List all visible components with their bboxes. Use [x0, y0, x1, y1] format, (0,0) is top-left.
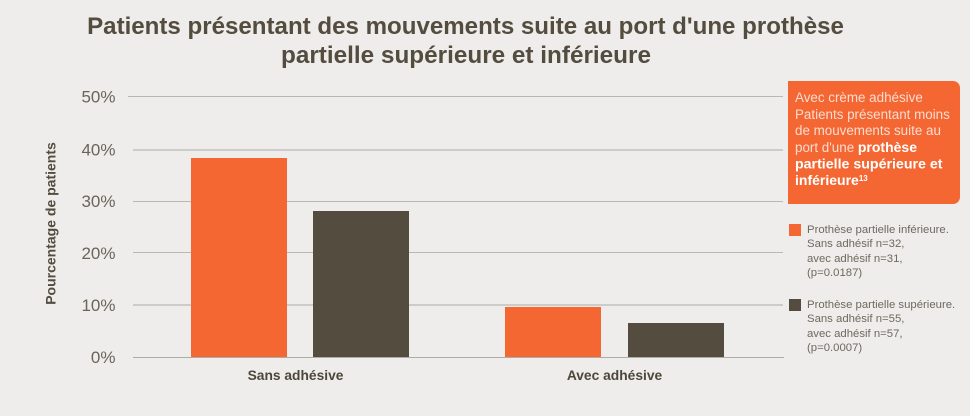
title [87, 13, 844, 69]
legend: prothèse partielle inférieure: (p=0.0187) [807, 267, 862, 279]
y axis labels: 10% [81, 296, 116, 315]
y axis labels: 40% [81, 140, 116, 160]
callout: partielle supérieure et [795, 156, 943, 172]
y axis labels: 50% [81, 88, 116, 106]
x axis labels: Avec adhésive [567, 368, 663, 383]
callout: Patients présentant moins [795, 107, 950, 122]
callout: Avec crème adhésive [795, 90, 923, 105]
callout [788, 81, 960, 204]
y axis labels [81, 88, 116, 367]
legend: prothèse partielle inférieure [789, 224, 949, 279]
legend: prothèse partielle inférieure: avec adhésif n=31, [807, 253, 903, 265]
y axis labels: 0% [91, 348, 116, 367]
legend: prothèse partielle supérieure: avec adhésif n=57, [807, 328, 903, 340]
y axis labels: 30% [81, 192, 116, 211]
bars: sans adhésive [191, 158, 409, 357]
legend: prothèse partielle supérieure [789, 299, 955, 354]
legend: prothèse partielle supérieure: (p=0.0007) [807, 342, 862, 354]
x axis labels [248, 368, 663, 383]
callout: de mouvements suite au [795, 123, 941, 138]
bar chart [81, 88, 784, 383]
y axis title: Pourcentage de patients [42, 142, 58, 305]
x axis labels: Sans adhésive [248, 368, 344, 383]
legend: prothèse partielle supérieure: Prothèse partielle supérieure. [807, 299, 955, 311]
y axis labels: 20% [81, 244, 116, 263]
bars: avec adhésive [505, 307, 724, 357]
legend: prothèse partielle inférieure: Prothèse partielle inférieure. [807, 224, 949, 236]
legend: prothèse partielle supérieure: Sans adhésif n=55, [807, 313, 904, 325]
callout: inférieure [795, 172, 859, 188]
title: partielle supérieure et inférieure [281, 42, 651, 69]
legend: prothèse partielle inférieure: Sans adhésif n=32, [807, 238, 904, 250]
callout: port d'une prothèse [795, 139, 917, 155]
callout: 13 [859, 174, 868, 183]
title: Patients présentant des mouvements suite au port d'une prothèse [87, 13, 844, 40]
